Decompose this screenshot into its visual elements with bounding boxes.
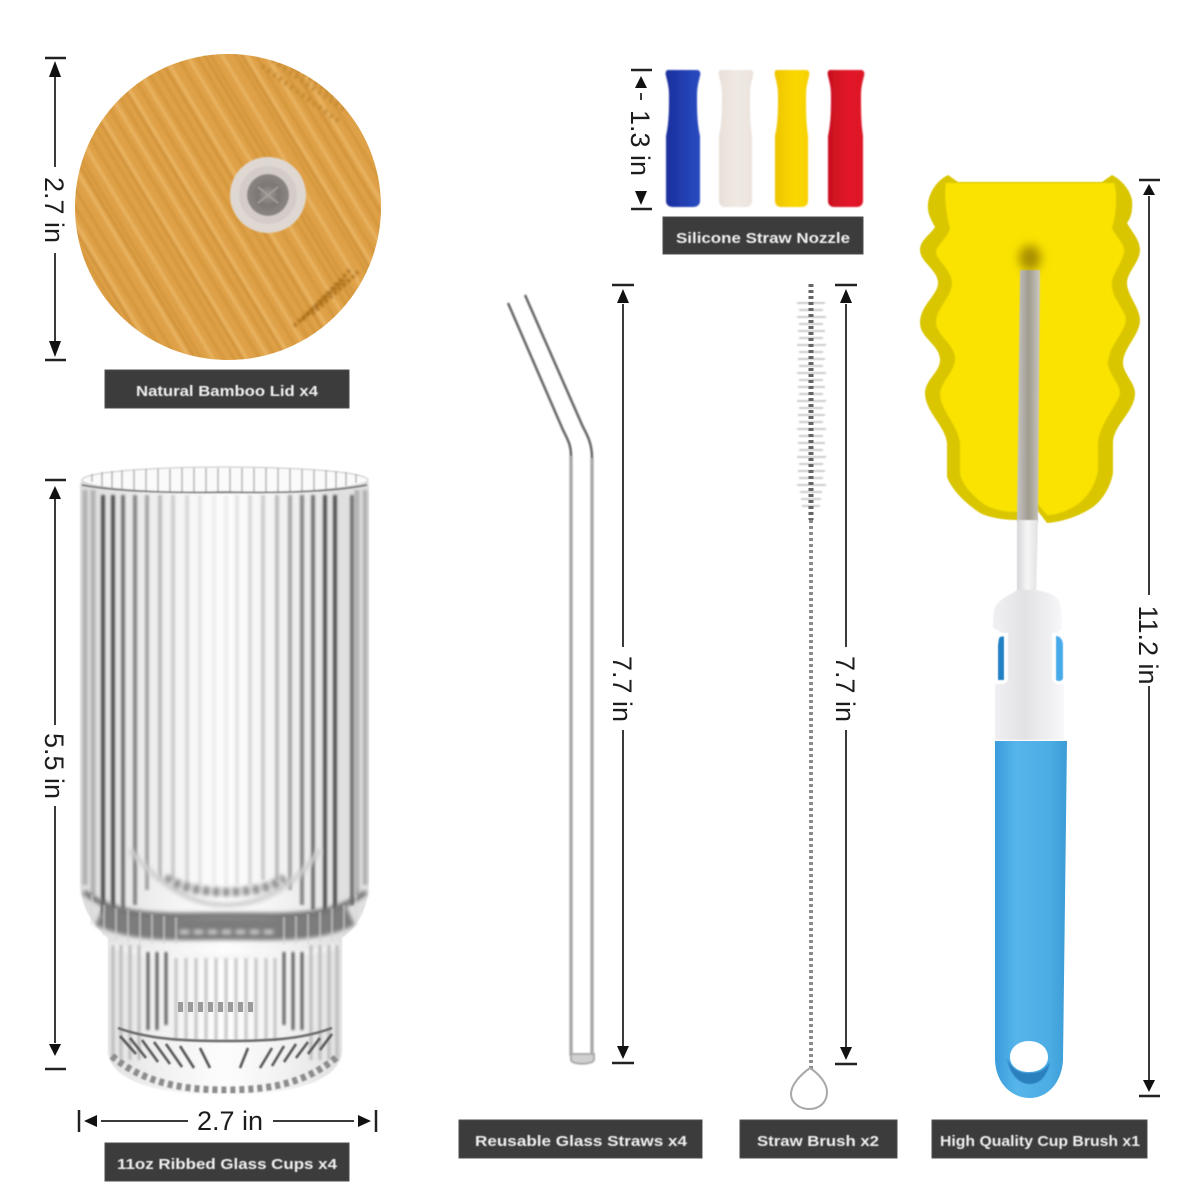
nozzle: blue xyxy=(666,70,700,207)
brush handle xyxy=(995,741,1067,1098)
brush window: right xyxy=(1056,636,1063,681)
dimension: lid 2.7 in: 2.7 in xyxy=(39,177,69,243)
label: silicone straw nozzle xyxy=(663,217,863,254)
dimension: cup brush 11.2 in: 11.2 in xyxy=(1133,605,1163,685)
brush wire upper xyxy=(808,284,814,520)
icon: ribbed glass cup xyxy=(80,467,369,1095)
dimension: lid 2.7 in xyxy=(39,58,69,360)
icon: lid silicone grommet xyxy=(230,157,306,233)
nozzle: yellow xyxy=(775,70,809,207)
icon: reusable glass straw xyxy=(508,295,594,1064)
glass base inner arc xyxy=(112,1028,338,1090)
glass body xyxy=(80,467,369,1095)
glass rim xyxy=(82,467,368,493)
dimension: nozzle 1.3 in xyxy=(625,70,655,209)
label: reusable glass straws: Reusable Glass Straws x4 xyxy=(475,1133,688,1150)
icon: straw brush xyxy=(791,284,827,1109)
label: straw brush xyxy=(740,1120,897,1158)
label: silicone straw nozzle: Silicone Straw Nozzle xyxy=(676,230,850,247)
icon: silicone straw nozzles xyxy=(666,70,864,207)
dimension: nozzle 1.3 in: 1.3 in xyxy=(625,110,655,176)
sponge xyxy=(920,175,1140,523)
label: natural bamboo lid xyxy=(105,370,349,408)
glass base dots xyxy=(178,1002,256,1012)
dimension: brush 7.7 in xyxy=(830,285,860,1064)
brush window: left xyxy=(998,636,1004,680)
brush head collar xyxy=(993,590,1064,740)
label: natural bamboo lid: Natural Bamboo Lid x4 xyxy=(136,383,319,400)
dimension: cup width 2.7 in: 2.7 in xyxy=(197,1106,263,1136)
nozzle: red xyxy=(828,70,864,207)
dimension: straw 7.7 in: 7.7 in xyxy=(607,656,637,722)
brush hole shadow xyxy=(1007,1058,1050,1084)
dimension: cup height 5.5 in: 5.5 in xyxy=(39,733,69,799)
dimension: brush 7.7 in: 7.7 in xyxy=(830,656,860,722)
glass flange band xyxy=(84,892,366,957)
label: ribbed glass cups: 11oz Ribbed Glass Cups x4 xyxy=(117,1156,338,1173)
glass flange rib highlights xyxy=(92,895,356,944)
glass inner bottom xyxy=(130,850,320,905)
brush stem xyxy=(1017,270,1040,522)
nozzle: white xyxy=(719,70,753,207)
dimension: cup height 5.5 in xyxy=(39,480,69,1069)
dimension: cup width 2.7 in xyxy=(79,1106,376,1136)
label: ribbed glass cups xyxy=(105,1143,349,1181)
label: reusable glass straws xyxy=(459,1120,702,1158)
label: cup brush xyxy=(932,1120,1147,1158)
dimension: straw 7.7 in xyxy=(607,285,637,1063)
icon: natural bamboo lid xyxy=(75,54,381,360)
glass base ribs xyxy=(112,945,338,1090)
label: straw brush: Straw Brush x2 xyxy=(757,1133,879,1150)
label: cup brush: High Quality Cup Brush x1 xyxy=(940,1133,1140,1150)
brush bristles xyxy=(797,303,826,506)
icon: cup brush xyxy=(920,175,1140,1098)
dimension: cup brush 11.2 in xyxy=(1133,180,1163,1096)
brush wire lower xyxy=(809,520,813,1070)
brush loop xyxy=(791,1068,827,1109)
glass ribs xyxy=(85,490,365,915)
